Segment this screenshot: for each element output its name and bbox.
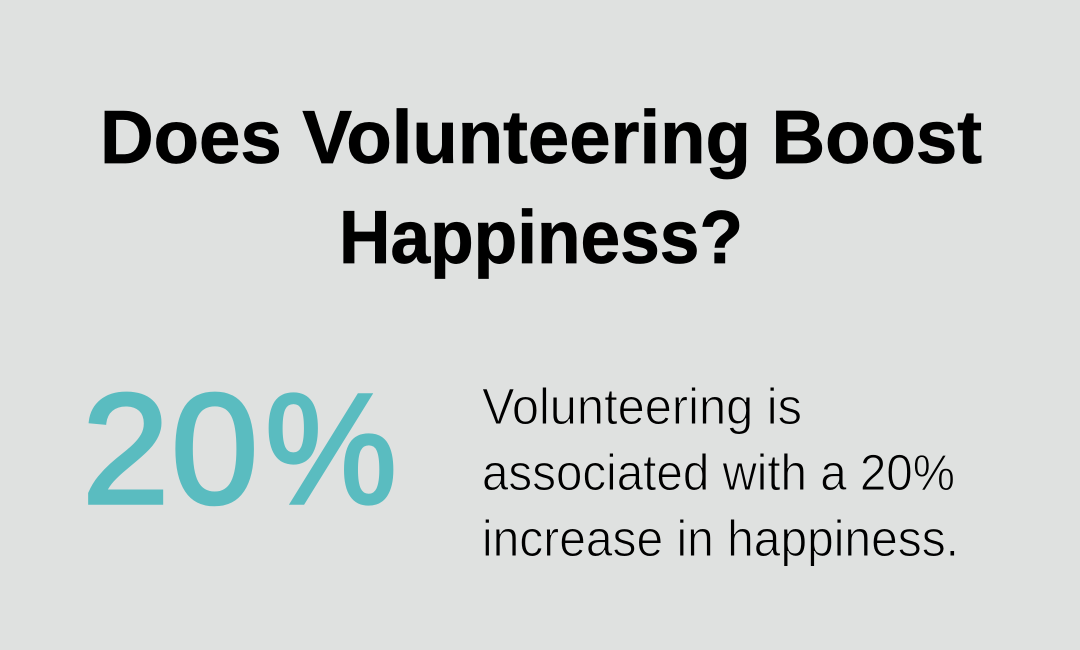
- big statistic: 20%: %: [265, 362, 397, 537]
- description text: increase in happiness.: [482, 510, 959, 567]
- description text: [482, 378, 959, 567]
- big statistic: 20%: [82, 362, 397, 537]
- description text: associated with a 20%: [482, 444, 955, 501]
- title: [100, 95, 982, 279]
- big statistic: 20%: 2: [82, 362, 169, 537]
- title: Happiness?: [339, 195, 743, 279]
- description text: Volunteering is: [482, 378, 802, 435]
- big statistic: 20%: 0: [171, 362, 258, 537]
- title: Does Volunteering Boost: [100, 95, 982, 179]
